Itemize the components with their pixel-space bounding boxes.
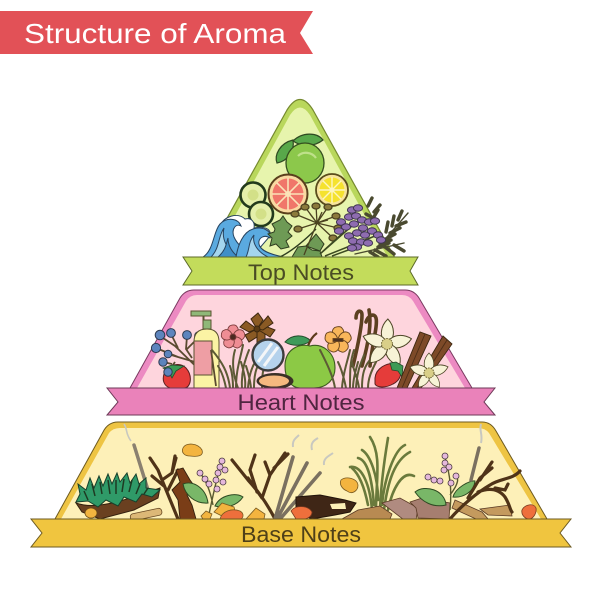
icon: lime [276, 134, 324, 183]
icon: left incense stick [124, 424, 148, 490]
icon: cucumber slices [240, 182, 273, 226]
ribbon: top notes [183, 257, 418, 285]
icon: dill umbel [291, 203, 342, 255]
icon: orange flower [324, 327, 352, 354]
title: Structure of Aroma [24, 18, 286, 49]
icon: right incense stick [471, 424, 482, 480]
icon: vanilla pods [353, 310, 376, 366]
icon: bark piece [172, 468, 196, 519]
label: base notes: Base Notes [241, 522, 361, 547]
icon: left grass [212, 345, 264, 388]
icon: orange stone [291, 507, 312, 520]
icon: pink flower [220, 325, 246, 350]
icon: amber stone right [340, 478, 358, 493]
panel: top notes [203, 100, 408, 258]
icon: orange stones left [201, 503, 265, 519]
icon: right strawberry [375, 362, 403, 387]
icon: flowering plant left [183, 458, 243, 519]
icon: parsley [268, 216, 324, 257]
icon: purple lavender [320, 205, 386, 256]
icon: cinnamon sticks [397, 332, 452, 388]
icon: lemon slice [316, 174, 348, 206]
icon: bare branch centre [232, 453, 288, 519]
label: top notes: Top Notes [248, 260, 354, 285]
title banner [0, 11, 313, 54]
icon: flowering plant right [415, 453, 475, 510]
icon: star anise [240, 313, 275, 344]
icon: blueberry branch [151, 329, 216, 386]
ribbon: heart notes [107, 388, 495, 415]
icon: incense bundle [275, 435, 333, 519]
icon: lotion bottle [191, 311, 219, 388]
icon: makeup mirror and compact [252, 340, 294, 389]
icon: left strawberry [163, 365, 190, 388]
icon: dark lavender [355, 198, 408, 257]
panel: base notes [55, 422, 547, 521]
icon: orange stone right [522, 505, 536, 519]
icon: right branch [450, 462, 520, 519]
icon: wood pieces and rocks [342, 498, 512, 520]
ribbon: base notes [31, 519, 571, 547]
panel: heart notes [130, 290, 472, 390]
icon: white flower large [361, 319, 413, 369]
icon: right grass [320, 350, 376, 388]
icon: white flower small [408, 353, 450, 390]
icon: grapefruit slice [268, 174, 308, 214]
icon: dark wood [296, 495, 356, 519]
icon: amber stone [182, 444, 202, 456]
icon: green apple [285, 333, 335, 388]
icon: ocean wave [203, 215, 284, 257]
label: heart notes: Heart Notes [238, 390, 364, 415]
icon: vetiver grass [350, 437, 414, 510]
icon: moss clump [76, 473, 162, 521]
icon: left twig [150, 456, 178, 519]
